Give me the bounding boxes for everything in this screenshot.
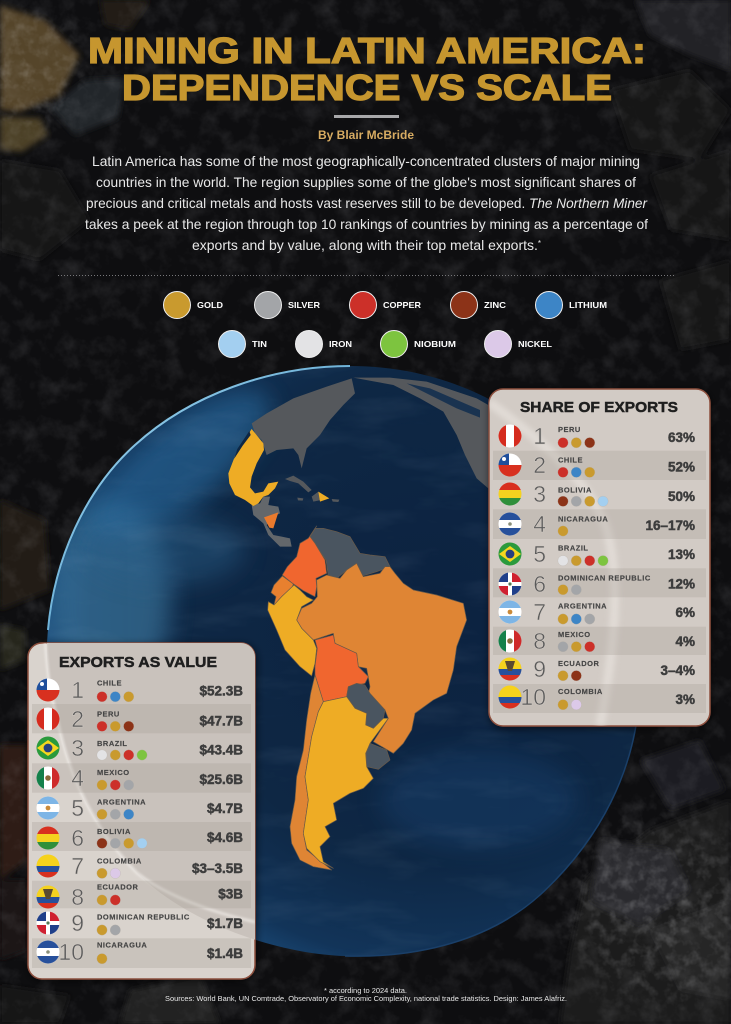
row: Peru <box>498 423 695 449</box>
legend item: nickel: NICKEL <box>518 339 552 349</box>
legend item: niobium: NIOBIUM <box>414 339 456 349</box>
row: Nicaragua: 4 <box>533 511 546 537</box>
row: Dominican Republic: $1.7B <box>207 916 243 931</box>
footnote and sources: * according to 2024 data. <box>324 986 407 995</box>
row: Colombia: COLOMBIA <box>558 687 603 696</box>
row: Dominican Republic: 6 <box>533 571 546 597</box>
row: Mexico: $25.6B <box>199 772 243 787</box>
row: Mexico <box>498 628 695 654</box>
row: Chile: 2 <box>533 452 546 478</box>
row: Bolivia: BOLIVIA <box>558 485 592 494</box>
intro paragraph: countries in the world. The region supplies some of the globe's most significant shares of <box>96 174 636 190</box>
row: Chile: 52% <box>668 460 695 474</box>
title divider <box>334 115 399 118</box>
row: Ecuador: 8 <box>71 884 84 910</box>
dotted separator <box>58 274 675 276</box>
row: Ecuador: ECUADOR <box>558 659 600 668</box>
row: Argentina <box>498 599 695 625</box>
row: Chile: CHILE <box>97 679 122 688</box>
row: Mexico: 4% <box>675 634 695 649</box>
row: Nicaragua <box>36 939 243 965</box>
row: Brazil <box>498 541 695 567</box>
row: Mexico <box>36 765 243 791</box>
row: Ecuador: 9 <box>533 656 546 682</box>
legend item: tin: TIN <box>252 339 267 349</box>
row: Peru: $47.7B <box>199 714 243 728</box>
legend item: niobium <box>380 330 456 358</box>
row: Brazil: 3 <box>71 735 84 761</box>
row: Argentina: ARGENTINA <box>558 602 607 611</box>
row: Peru: 63% <box>668 430 695 445</box>
title <box>88 30 646 108</box>
row: Nicaragua: $1.4B <box>207 946 243 961</box>
row: Peru: PERU <box>558 425 581 434</box>
legend item: zinc <box>450 292 506 318</box>
row: Dominican Republic: DOMINICAN REPUBLIC <box>97 913 190 922</box>
row: Bolivia: 6 <box>71 825 84 851</box>
row: Ecuador: 3–4% <box>660 663 695 678</box>
row: Bolivia: 3 <box>533 481 546 507</box>
row: Bolivia: 50% <box>668 489 695 504</box>
row: Bolivia <box>498 481 695 507</box>
intro paragraph: precious and critical metals and hosts vast reserves still to be developed. The Northern Miner <box>86 195 648 211</box>
row: Bolivia: $4.6B <box>207 830 243 845</box>
row: Peru <box>36 706 243 732</box>
row: Colombia: 10 <box>520 684 546 710</box>
row: Mexico: MEXICO <box>97 768 130 777</box>
row: Brazil: BRAZIL <box>97 739 128 748</box>
country: Mexico <box>228 429 278 506</box>
row: Chile: $52.3B <box>199 684 243 698</box>
legend item: silver: SILVER <box>288 300 320 310</box>
globe with highlighted countries <box>40 360 650 960</box>
legend item: iron: IRON <box>329 339 352 349</box>
row: Peru: PERU <box>97 709 120 718</box>
legend item: copper: COPPER <box>383 300 421 310</box>
row: Mexico: MEXICO <box>558 630 591 639</box>
row: Chile <box>36 677 243 703</box>
row: Dominican Republic <box>498 571 695 597</box>
row: Colombia: 7 <box>71 853 84 879</box>
intro paragraph: Latin America has some of the most geographically-concentrated clusters of major mining <box>92 153 640 169</box>
legend item: zinc: ZINC <box>484 300 506 310</box>
row: Ecuador: $3B <box>218 886 243 902</box>
row: Bolivia <box>36 825 243 851</box>
panel: exports as value <box>28 640 255 979</box>
country: Paraguay <box>347 683 385 728</box>
row: Ecuador: ECUADOR <box>97 883 139 892</box>
row: Nicaragua: 16–17% <box>645 518 695 533</box>
row: Nicaragua <box>498 511 695 537</box>
country: Nicaragua <box>264 512 278 528</box>
intro paragraph: takes a peek at the region through top 10 rankings of countries by mining as a percentage of <box>85 216 648 232</box>
row: Colombia <box>36 853 243 879</box>
row: Ecuador <box>498 656 695 682</box>
row: Peru: 1 <box>533 423 546 449</box>
intro paragraph: * <box>538 239 541 248</box>
legend item: nickel <box>484 330 552 358</box>
country: Ecuador <box>271 576 293 605</box>
row: Argentina: 7 <box>533 599 546 625</box>
row: Nicaragua: NICARAGUA <box>558 514 608 523</box>
row: Colombia: $3–3.5B <box>192 861 243 876</box>
Central America <box>252 497 292 547</box>
legend item: copper <box>350 292 421 318</box>
row: Argentina <box>36 795 243 821</box>
intro paragraph: exports and by value, along with their top metal exports. <box>192 237 538 253</box>
row: Brazil: 5 <box>533 541 546 567</box>
Gulf of California <box>234 431 251 459</box>
country: Peru <box>268 585 317 676</box>
countries without data: Venezuela and Guianas <box>310 528 390 578</box>
row: Mexico: 8 <box>533 628 546 654</box>
row: Peru: 2 <box>71 706 84 732</box>
legend item: iron <box>296 330 352 358</box>
panel heading: SHARE OF EXPORTS <box>520 399 678 416</box>
row: Brazil: 13% <box>668 547 695 562</box>
country: Dominican Republic <box>318 492 329 502</box>
panel: share of exports <box>489 389 710 726</box>
row: Argentina: ARGENTINA <box>97 797 146 806</box>
row: Colombia: COLOMBIA <box>97 856 142 865</box>
country: Uruguay <box>366 743 390 769</box>
intro paragraph <box>85 153 648 253</box>
country: Chile <box>290 675 332 870</box>
row: Mexico: 4 <box>71 765 84 791</box>
row: Chile <box>498 452 695 478</box>
legend item: lithium: LITHIUM <box>569 300 607 310</box>
row: Dominican Republic <box>36 910 243 936</box>
row: Brazil: BRAZIL <box>558 544 588 553</box>
rest of world: USA, Africa and Caribbean in grey <box>228 378 488 547</box>
legend: metals <box>164 292 607 358</box>
country: Argentina <box>303 697 388 868</box>
row: Argentina: 6% <box>675 605 695 620</box>
row: Argentina: $4.7B <box>207 801 243 816</box>
title: MINING IN LATIN AMERICA: <box>88 30 646 71</box>
legend item: tin <box>218 330 267 358</box>
row: Dominican Republic: 9 <box>71 910 84 936</box>
legend item: gold: GOLD <box>197 300 223 310</box>
row: Chile: 1 <box>71 677 84 703</box>
row: Nicaragua: 10 <box>58 939 84 965</box>
legend item: lithium <box>536 292 607 318</box>
byline: By Blair McBride <box>318 128 414 142</box>
row: Brazil: $43.4B <box>199 742 243 758</box>
row: Nicaragua: NICARAGUA <box>97 941 147 950</box>
footnote and sources: Sources: World Bank, UN Comtrade, Observatory of Economic Complexity, national trade statistics. Design: James Alafriz. <box>165 994 567 1003</box>
legend item: silver <box>254 292 320 318</box>
panel heading: EXPORTS AS VALUE <box>59 654 217 671</box>
row: Bolivia: BOLIVIA <box>97 827 131 836</box>
row: Brazil <box>36 735 243 761</box>
row: Colombia <box>498 684 695 710</box>
row: Colombia: 3% <box>675 692 695 707</box>
country: Colombia <box>282 526 327 597</box>
footnote and sources <box>165 986 567 1003</box>
country: Bolivia <box>315 635 368 702</box>
South America <box>268 526 467 870</box>
row: Argentina: 5 <box>71 795 84 821</box>
legend item: gold <box>164 292 223 318</box>
title: DEPENDENCE VS SCALE <box>122 67 612 108</box>
row: Dominican Republic: DOMINICAN REPUBLIC <box>558 573 651 582</box>
country: Brazil <box>297 563 467 753</box>
row: Dominican Republic: 12% <box>668 576 695 592</box>
row: Chile: CHILE <box>558 456 583 465</box>
row: Ecuador <box>36 883 243 910</box>
